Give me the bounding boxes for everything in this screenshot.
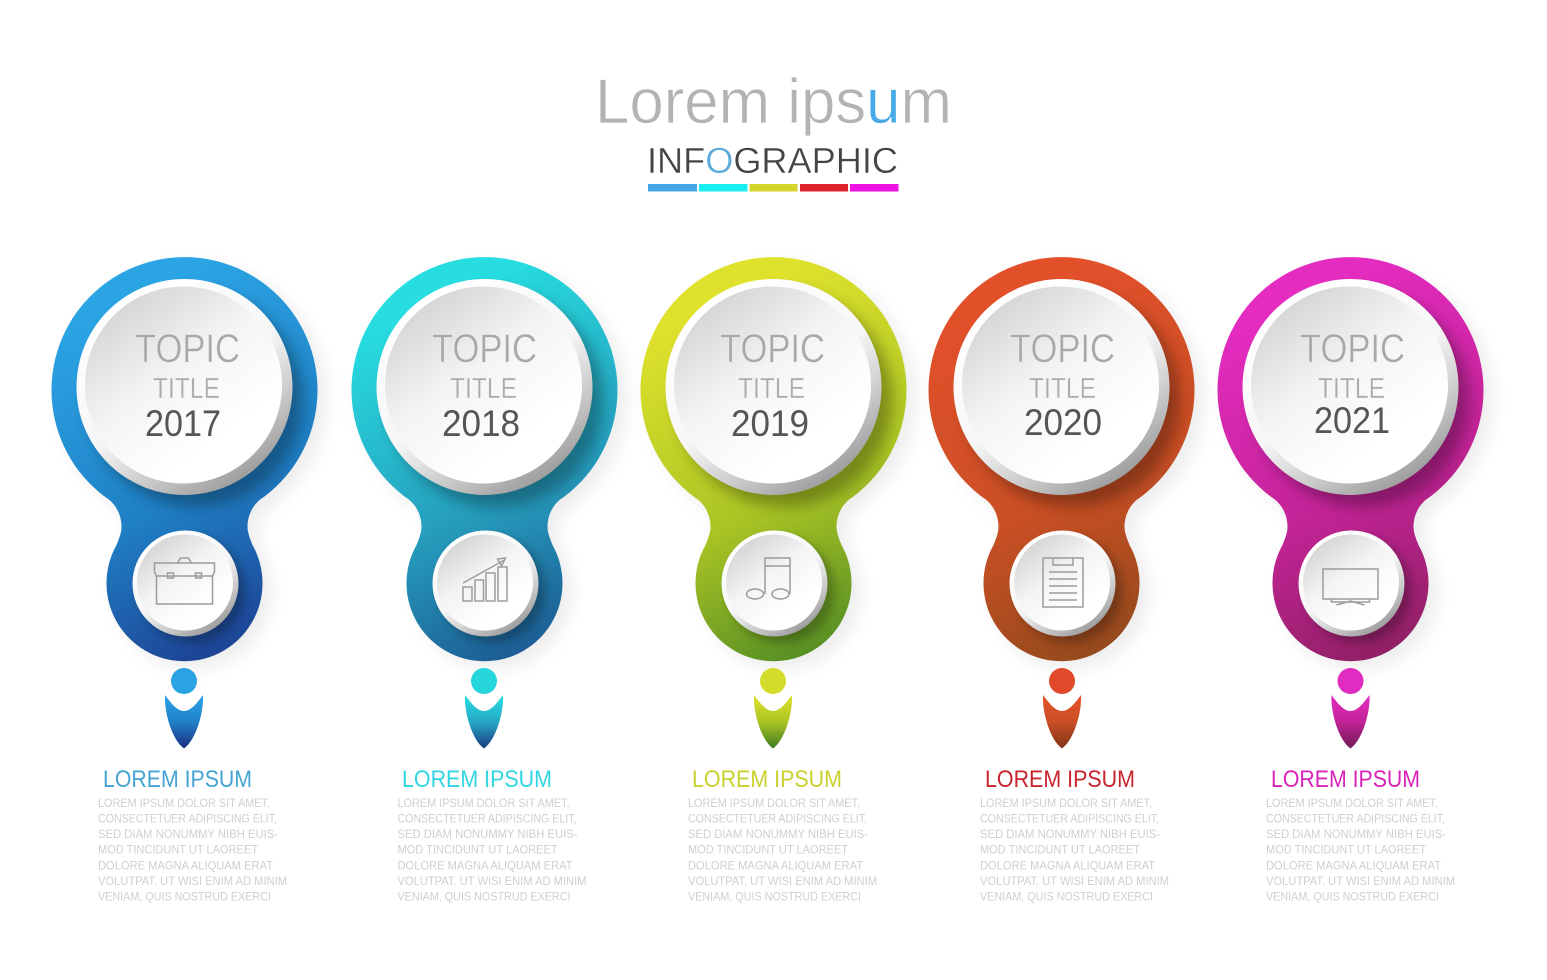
pin shape 2019: [640, 257, 916, 669]
panel: 2017: [52, 257, 326, 904]
panel: 2020: [928, 257, 1204, 904]
body text 2018: DOLORE MAGNA ALIQUAM ERAT: [398, 858, 573, 872]
body text 2017: SED DIAM NONUMMY NIBH EUIS-: [98, 827, 278, 841]
icon: person 2021: [1331, 668, 1370, 748]
body text 2020: SED DIAM NONUMMY NIBH EUIS-: [980, 827, 1160, 841]
pin shape 2021: [1218, 257, 1492, 669]
year 2021: 2021: [1314, 400, 1390, 441]
heading 2019: LOREM IPSUM: [692, 766, 842, 793]
panel: 2018: [352, 257, 626, 904]
body text 2019: DOLORE MAGNA ALIQUAM ERAT: [688, 858, 864, 872]
body text 2019: CONSECTETUER ADIPISCING ELIT,: [688, 812, 867, 826]
body text 2017: VOLUTPAT. UT WISI ENIM AD MINIM: [98, 874, 287, 888]
body text 2017: CONSECTETUER ADIPISCING ELIT,: [98, 812, 277, 826]
title label 2021: TITLE: [1318, 373, 1385, 405]
body text 2019: SED DIAM NONUMMY NIBH EUIS-: [688, 827, 868, 841]
body text 2017: [98, 796, 287, 904]
icon: person 2019: [754, 668, 792, 748]
year 2017: 2017: [145, 403, 221, 444]
subtitle: infographic: INFOGRAPHIC: [647, 140, 898, 181]
body text 2019: VOLUTPAT. UT WISI ENIM AD MINIM: [688, 874, 877, 888]
body text 2018: LOREM IPSUM DOLOR SIT AMET,: [398, 796, 570, 810]
year 2018: 2018: [442, 403, 520, 444]
colour bar strip: [648, 184, 898, 192]
title label 2020: TITLE: [1029, 373, 1096, 405]
body text 2020: CONSECTETUER ADIPISCING ELIT,: [980, 812, 1159, 826]
title label 2018: TITLE: [450, 373, 517, 405]
topic label 2019: TOPIC: [720, 327, 825, 371]
body text 2021: SED DIAM NONUMMY NIBH EUIS-: [1266, 827, 1446, 841]
icon: person 2020: [1043, 668, 1081, 748]
body text 2019: LOREM IPSUM DOLOR SIT AMET,: [688, 796, 860, 810]
body text 2019: [688, 796, 877, 904]
body text 2019: MOD TINCIDUNT UT LAOREET: [688, 842, 849, 856]
panel: 2019: [640, 257, 916, 904]
body text 2019: VENIAM, QUIS NOSTRUD EXERCI: [688, 890, 861, 904]
year 2020: 2020: [1024, 402, 1102, 443]
topic label 2021: TOPIC: [1300, 327, 1405, 371]
body text 2021: LOREM IPSUM DOLOR SIT AMET,: [1266, 796, 1438, 810]
pin shape 2017: [52, 257, 326, 669]
heading 2018: LOREM IPSUM: [402, 766, 552, 793]
body text 2021: MOD TINCIDUNT UT LAOREET: [1266, 842, 1427, 856]
title: Lorem ipsum: [595, 67, 952, 137]
icon: clipboard document: [1043, 558, 1083, 607]
topic label 2017: TOPIC: [135, 327, 240, 371]
body text 2020: MOD TINCIDUNT UT LAOREET: [980, 842, 1141, 856]
body text 2020: VENIAM, QUIS NOSTRUD EXERCI: [980, 890, 1153, 904]
body text 2017: VENIAM, QUIS NOSTRUD EXERCI: [98, 890, 271, 904]
title label 2017: TITLE: [153, 373, 220, 405]
heading 2020: LOREM IPSUM: [985, 766, 1135, 793]
panel: 2021: [1218, 257, 1492, 904]
body text 2018: [398, 796, 586, 904]
pin shape 2018: [352, 257, 626, 669]
body text 2018: CONSECTETUER ADIPISCING ELIT,: [398, 812, 576, 826]
body text 2020: LOREM IPSUM DOLOR SIT AMET,: [980, 796, 1152, 810]
heading 2021: LOREM IPSUM: [1271, 766, 1420, 793]
body text 2020: [980, 796, 1169, 904]
topic label 2018: TOPIC: [432, 327, 537, 371]
icon: person 2017: [165, 668, 203, 748]
body text 2017: MOD TINCIDUNT UT LAOREET: [98, 842, 259, 856]
body text 2020: DOLORE MAGNA ALIQUAM ERAT: [980, 858, 1156, 872]
body text 2021: DOLORE MAGNA ALIQUAM ERAT: [1266, 858, 1442, 872]
icon: person 2018: [465, 668, 503, 748]
body text 2021: VENIAM, QUIS NOSTRUD EXERCI: [1266, 890, 1439, 904]
heading 2017: LOREM IPSUM: [103, 766, 252, 793]
body text 2020: VOLUTPAT. UT WISI ENIM AD MINIM: [980, 874, 1169, 888]
body text 2017: LOREM IPSUM DOLOR SIT AMET,: [98, 796, 270, 810]
body text 2021: VOLUTPAT. UT WISI ENIM AD MINIM: [1266, 874, 1455, 888]
body text 2018: MOD TINCIDUNT UT LAOREET: [398, 842, 558, 856]
icon: briefcase: [154, 558, 214, 604]
body text 2018: SED DIAM NONUMMY NIBH EUIS-: [398, 827, 578, 841]
body text 2017: DOLORE MAGNA ALIQUAM ERAT: [98, 858, 274, 872]
body text 2018: VENIAM, QUIS NOSTRUD EXERCI: [398, 890, 570, 904]
body text 2021: CONSECTETUER ADIPISCING ELIT,: [1266, 812, 1445, 826]
title label 2019: TITLE: [738, 373, 805, 405]
topic label 2020: TOPIC: [1010, 327, 1115, 371]
icon: television: [1323, 569, 1378, 605]
year 2019: 2019: [731, 403, 809, 444]
body text 2021: [1266, 796, 1455, 904]
icon: growth chart: [463, 558, 507, 601]
icon: music note: [746, 558, 790, 599]
body text 2018: VOLUTPAT. UT WISI ENIM AD MINIM: [398, 874, 586, 888]
pin shape 2020: [928, 257, 1204, 669]
